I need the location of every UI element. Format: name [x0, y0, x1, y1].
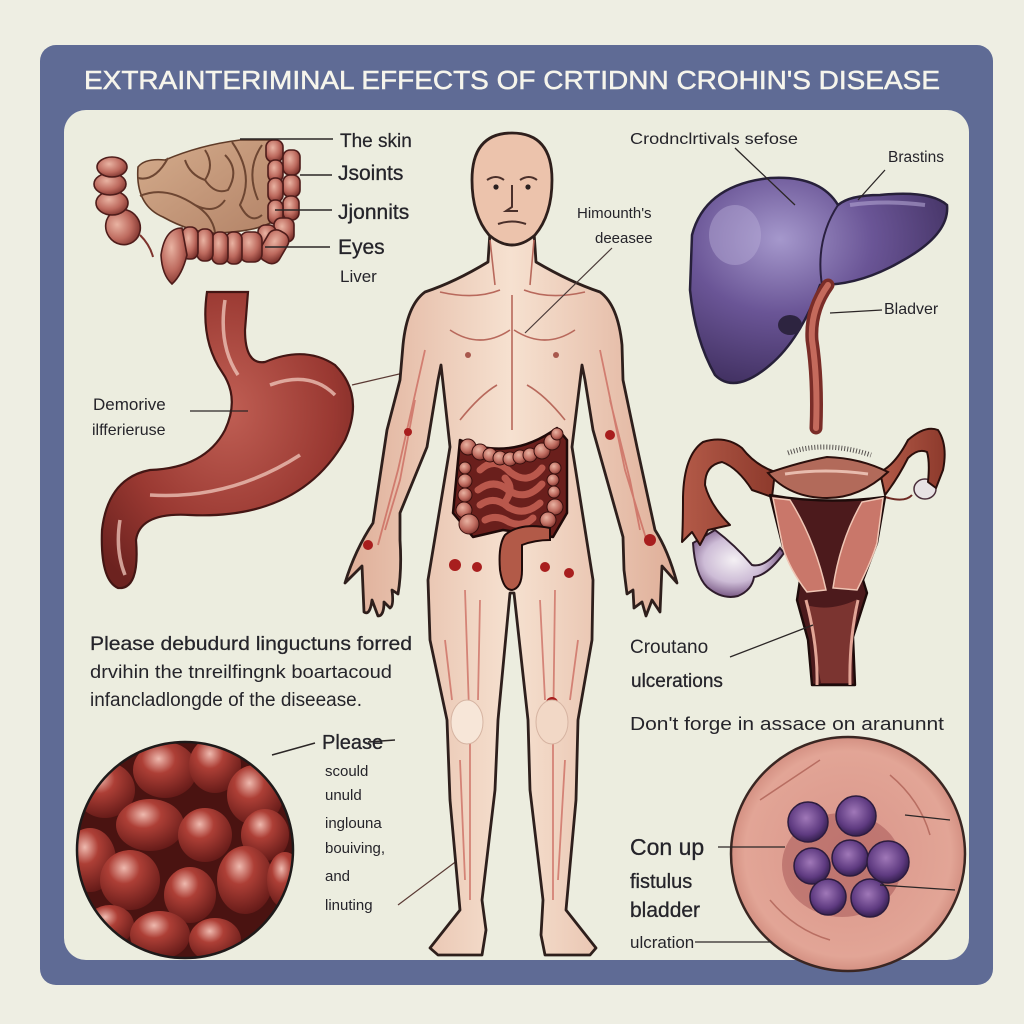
labels: intestine: The skin — [340, 131, 412, 152]
labels: intestine — [240, 131, 412, 286]
text block: drvihin the tnreilfingnk boartacoud — [90, 662, 392, 682]
label: ulcer list: fistulus — [630, 871, 692, 893]
title: EXTRAINTERIMINAL EFFECTS OF CRTIDNN CROHIN'S DISEASE — [84, 65, 940, 95]
label: tissue list: and — [325, 868, 350, 885]
text block: Please debudurd linguctuns forred — [90, 633, 412, 655]
label: stomach — [92, 368, 425, 439]
icon: intestine — [94, 140, 300, 284]
label: center disease: deeasee — [595, 230, 653, 247]
label: tissue list: bouiving, — [325, 840, 385, 857]
labels: intestine: Liver — [340, 267, 377, 286]
small bowel — [138, 140, 272, 233]
lesions — [363, 428, 656, 709]
label: center disease — [577, 205, 653, 247]
icon: ulcer circle — [731, 737, 965, 971]
text block: note: Don't forge in assace on aranunnt — [630, 714, 944, 734]
label: ulcer list: bladder — [630, 899, 700, 922]
left tube — [682, 440, 775, 545]
vaginal canal — [806, 600, 856, 683]
label: ulcer list: ulcration — [630, 933, 694, 952]
label: uterus: Croutano — [630, 637, 708, 658]
inner panel — [64, 110, 969, 960]
body outline — [345, 232, 677, 955]
labels: liver: Bladver — [884, 301, 939, 318]
left colon piece — [94, 157, 153, 257]
label: uterus: ulcerations — [631, 671, 723, 692]
labels: intestine: Jsoints — [338, 162, 403, 185]
human figure — [345, 133, 677, 955]
fundus — [768, 457, 888, 498]
lining — [773, 498, 826, 592]
vessels — [378, 350, 648, 900]
label: tissue list: linuting — [325, 897, 373, 914]
right tube — [880, 429, 945, 495]
label: tissue list: scould — [325, 763, 368, 780]
icon: stomach — [102, 292, 353, 588]
labels: liver: Crodnclrtivals sefose — [630, 131, 798, 148]
face — [487, 177, 537, 224]
colon — [161, 140, 300, 284]
label: ulcer list: Con up — [630, 834, 704, 860]
icon: liver — [690, 178, 947, 428]
text block: infancladlongde of the diseease. — [90, 690, 362, 711]
label: tissue list: inglouna — [325, 815, 382, 832]
uterus body — [770, 495, 885, 685]
knees — [451, 700, 483, 744]
torso lines — [440, 240, 585, 430]
label: uterus — [630, 625, 813, 692]
label: stomach: Demorive — [93, 395, 166, 414]
label: tissue list — [272, 732, 478, 914]
labels: intestine: Jjonnits — [338, 201, 409, 224]
text block — [90, 633, 412, 711]
icon: body intestine — [453, 428, 567, 590]
labels: liver: Brastins — [888, 149, 944, 166]
label: stomach: ilfferieruse — [92, 422, 166, 439]
icon: inflamed tissue circle — [76, 740, 294, 960]
label: ulcer list — [630, 815, 955, 952]
ovary right — [885, 495, 912, 500]
labels: liver — [630, 131, 944, 318]
icon: uterus — [682, 429, 945, 685]
ovary left — [693, 530, 784, 597]
head — [472, 133, 552, 245]
label: tissue list: Please — [322, 732, 383, 754]
label: tissue list: unuld — [325, 787, 362, 804]
label: center disease: Himounth's — [577, 205, 652, 222]
labels: intestine: Eyes — [338, 236, 385, 259]
